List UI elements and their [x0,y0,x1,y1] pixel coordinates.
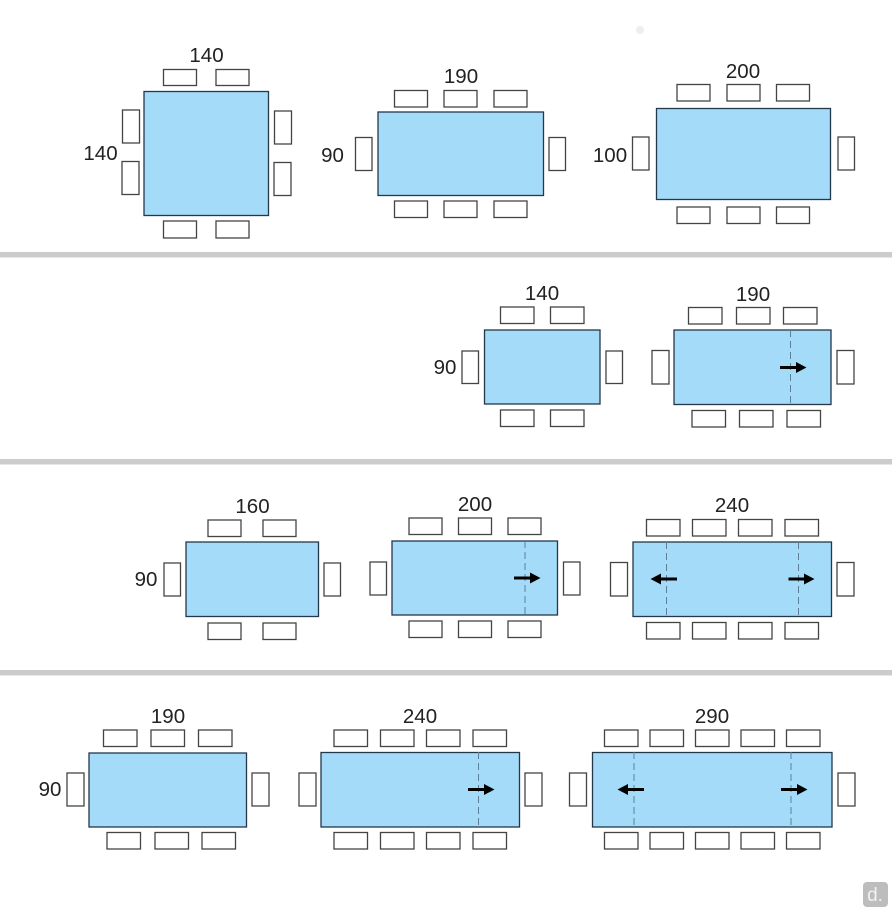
diagram: double-extended table 240 x 90 [610,494,854,639]
diagram: double-extended table 290 x 90 [570,705,855,849]
depth label 140: 140 [83,142,118,165]
width label 140: 140 [189,44,224,67]
chairs [164,520,340,640]
extension fold lines [666,542,798,616]
table top [592,752,832,827]
table top [89,753,246,827]
width label 190: 190 [444,65,478,88]
arrow left [618,784,644,795]
diagram: square table 140 x 140 [83,44,292,238]
arrow right [780,362,806,373]
chairs [122,70,292,238]
logo badge [863,882,888,907]
diagram: table 140 x 90 [434,282,622,426]
diagram: table 160 x 90 [135,495,340,640]
chairs [299,730,542,849]
width label 290: 290 [695,705,729,728]
diagram: extended table 190 x 90 [652,283,854,427]
table top [484,330,600,404]
table top [392,541,558,615]
table top [321,752,520,827]
table top [186,542,318,616]
arrow left [650,574,677,584]
chairs [632,84,854,224]
chairs [652,308,854,427]
width label 200: 200 [458,493,492,516]
width label 240: 240 [403,705,437,728]
width label 200: 200 [726,60,760,83]
table top [656,108,830,200]
arrow right [514,572,540,584]
table top [378,112,544,196]
width label 160: 160 [235,495,270,518]
width label 190: 190 [151,705,185,728]
diagram: extended table 200 x 90 [370,493,580,638]
arrow right [468,784,494,795]
chairs [570,730,855,849]
chairs [610,520,854,639]
extension fold line [524,541,526,615]
width label 140: 140 [525,282,559,305]
chairs [370,518,580,638]
diagram: table 190 x 90 [39,705,269,849]
depth label 90: 90 [434,356,456,379]
width label 240: 240 [715,494,749,517]
depth label 90: 90 [321,144,344,167]
width label 190: 190 [736,283,770,306]
logo badge: d. [867,885,883,906]
chairs [356,90,566,218]
table top [633,542,832,616]
chairs [462,307,622,426]
arrow right [788,574,814,584]
diagram: table 200 x 100 [593,60,854,224]
arrow right [781,784,808,795]
depth label 90: 90 [39,778,61,801]
extension fold lines [634,752,791,827]
diagram: extended table 240 x 90 [299,705,542,849]
extension fold line [790,330,792,404]
depth label 90: 90 [135,568,157,591]
extension fold line [478,752,480,827]
depth label 100: 100 [593,144,627,167]
chairs [67,730,269,849]
table top [144,92,268,216]
table top [674,330,831,404]
diagram: table 190 x 90 [321,65,566,218]
